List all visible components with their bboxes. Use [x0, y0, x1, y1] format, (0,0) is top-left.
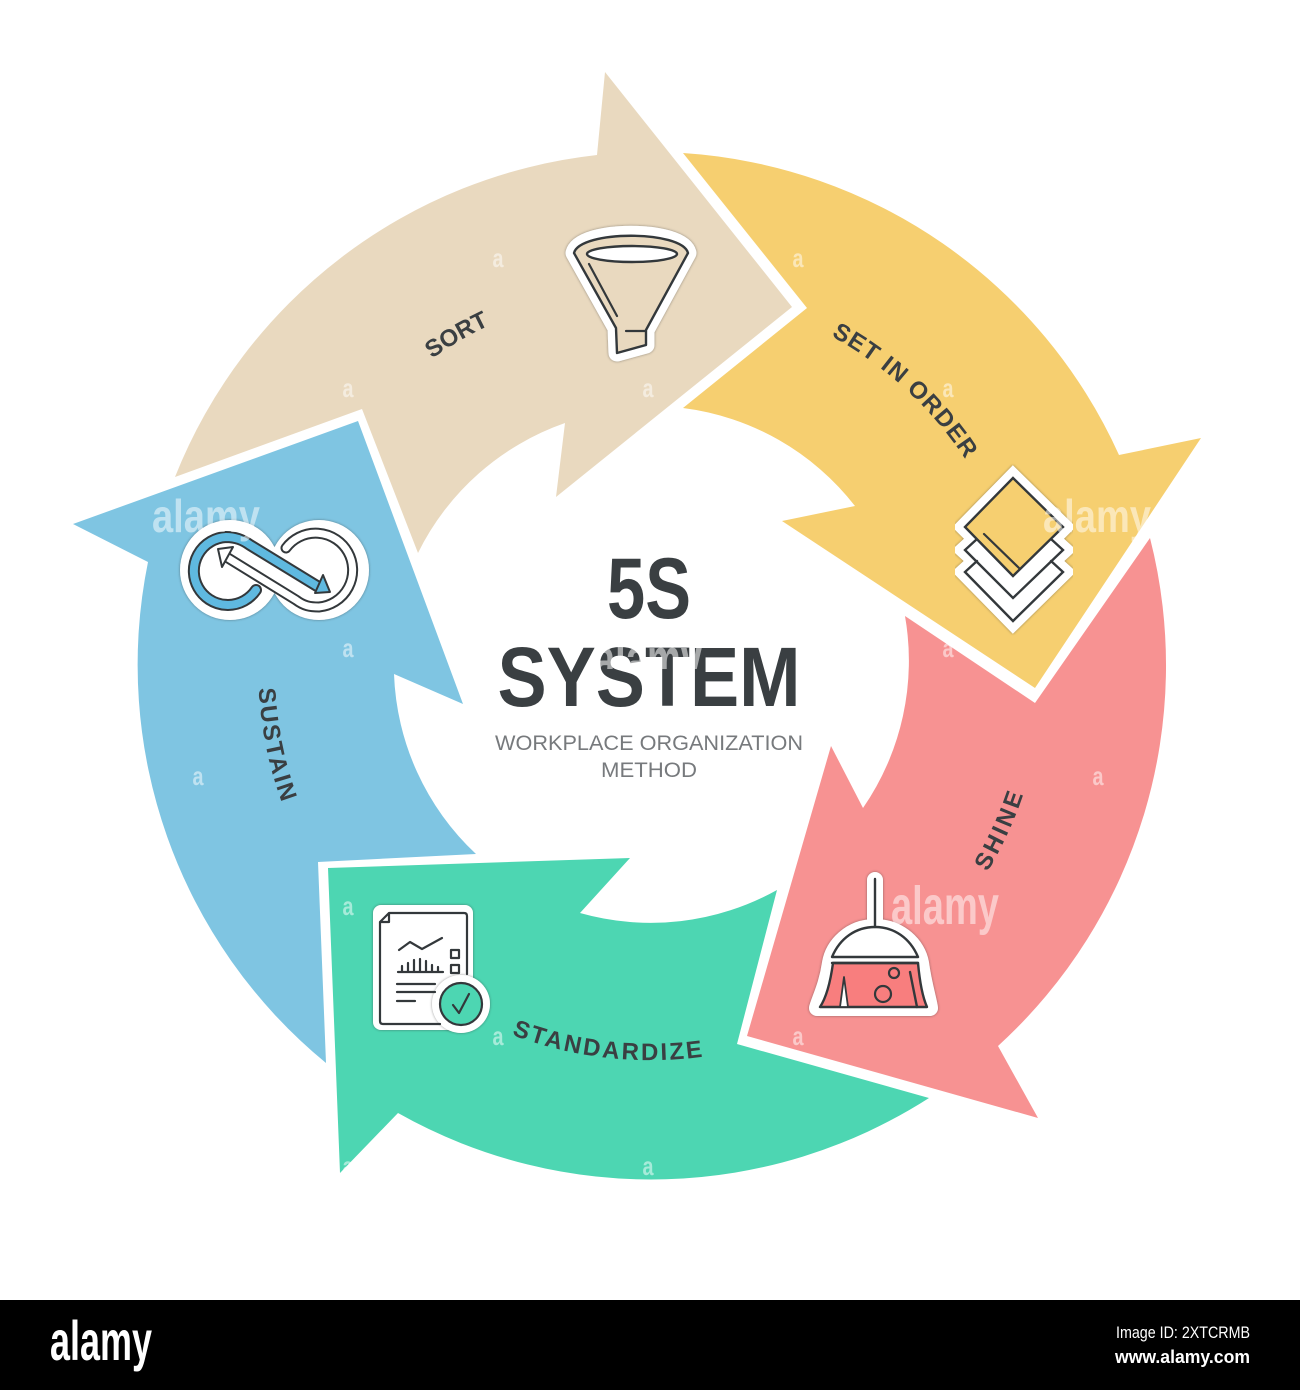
arrow panel: sustain	[73, 421, 476, 1063]
watermark: a	[342, 1151, 354, 1181]
footer logo: alamy	[50, 1309, 152, 1372]
watermark	[152, 243, 1151, 1181]
footer bar	[0, 1300, 1300, 1390]
label: set in order: SET IN ORDER	[834, 324, 976, 459]
subtitle	[495, 732, 803, 782]
watermark: a	[792, 1021, 804, 1051]
footer image id and url: Image ID: 2XTCRMB	[1116, 1323, 1250, 1342]
icon: checked document	[373, 905, 490, 1033]
subtitle: WORKPLACE ORGANIZATION	[495, 732, 803, 755]
label: standardize: STANDARDIZE	[514, 1021, 702, 1060]
watermark: a	[192, 761, 204, 791]
watermark: a	[942, 633, 954, 663]
title: 5S	[607, 541, 691, 637]
icon: funnel	[574, 234, 688, 353]
watermark: alamy	[891, 876, 999, 936]
watermark: a	[342, 633, 354, 663]
arrow panel: set in order	[683, 153, 1201, 688]
label: shine: SHINE	[976, 790, 1023, 870]
arrow panel: standardize	[328, 858, 929, 1180]
title: SYSTEM	[498, 630, 800, 724]
watermark: a	[492, 243, 504, 273]
watermark: a	[642, 1151, 654, 1181]
label: sustain: SUSTAIN	[258, 688, 297, 801]
icon: broom	[817, 879, 930, 1008]
label: sort: SORT	[426, 310, 484, 356]
footer image id and url: www.alamy.com	[1114, 1347, 1250, 1367]
watermark: a	[342, 891, 354, 921]
watermark: a	[942, 373, 954, 403]
watermark: a	[792, 243, 804, 273]
arrow panel: shine	[747, 538, 1166, 1118]
title	[498, 541, 800, 724]
subtitle: METHOD	[601, 759, 697, 782]
watermark: a	[642, 373, 654, 403]
footer image id and url	[1114, 1323, 1250, 1367]
watermark: a	[342, 373, 354, 403]
center watermark: alamy	[594, 626, 702, 693]
watermark: alamy	[152, 490, 260, 542]
watermark: a	[1092, 761, 1104, 791]
arrow panel: sort	[175, 72, 792, 553]
icon: infinity loop	[180, 520, 369, 620]
watermark: alamy	[1043, 490, 1151, 542]
watermark: a	[492, 1021, 504, 1051]
icon: stacked layers	[965, 478, 1063, 621]
